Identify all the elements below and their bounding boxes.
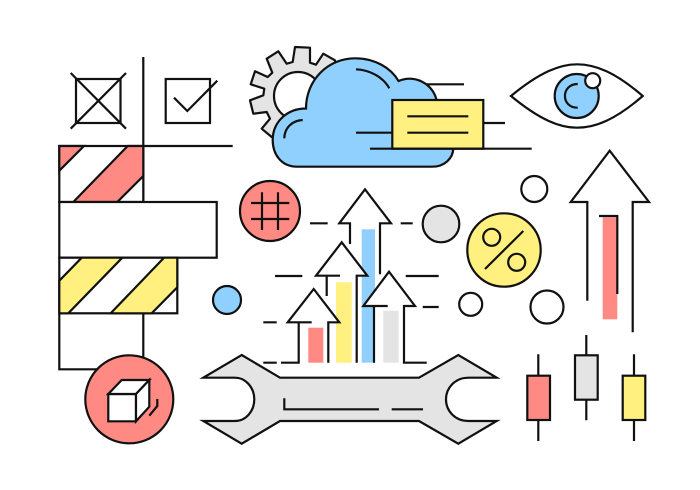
blue bar xyxy=(362,229,375,363)
speed lines behind cloud xyxy=(425,83,464,85)
cloud xyxy=(273,58,453,167)
frame lines xyxy=(143,57,233,202)
red striped panel xyxy=(59,146,143,202)
chart: candlesticks xyxy=(527,335,645,441)
candle: red xyxy=(527,354,550,441)
white circle: top xyxy=(521,176,547,202)
icon: cube in red circle xyxy=(85,355,173,443)
white circle: large xyxy=(530,290,564,324)
arrow: tallest xyxy=(339,189,391,274)
red bar xyxy=(308,328,323,363)
white circle: small xyxy=(459,293,482,316)
candle: yellow xyxy=(623,354,645,441)
gear xyxy=(250,47,340,137)
note xyxy=(392,100,483,149)
cloud highlights xyxy=(284,69,389,138)
blue circle xyxy=(213,286,241,314)
icon: eye xyxy=(511,64,643,128)
white plank xyxy=(59,202,217,258)
striped barrier structure xyxy=(59,57,233,369)
icon: crossed checkbox xyxy=(71,73,126,129)
candle: grey xyxy=(575,335,598,420)
lower frame xyxy=(59,313,143,369)
chart: rising arrows xyxy=(263,189,439,363)
grey bar xyxy=(383,311,399,363)
dashes xyxy=(263,223,439,363)
icon: wrench xyxy=(203,355,497,444)
yellow bar xyxy=(336,282,352,363)
icon: ticked checkbox xyxy=(166,79,217,123)
arrow: right xyxy=(363,272,427,363)
speed lines xyxy=(356,123,532,149)
grey circle xyxy=(423,206,459,242)
icon: large up arrow xyxy=(571,151,649,332)
arrow: shortest xyxy=(281,289,339,363)
yellow striped panel xyxy=(59,258,177,313)
icon: hash in red circle xyxy=(240,181,300,241)
icon: percent in yellow circle xyxy=(467,213,541,287)
arrow: second xyxy=(316,242,367,363)
icon: cloud with gear and note xyxy=(250,47,532,167)
